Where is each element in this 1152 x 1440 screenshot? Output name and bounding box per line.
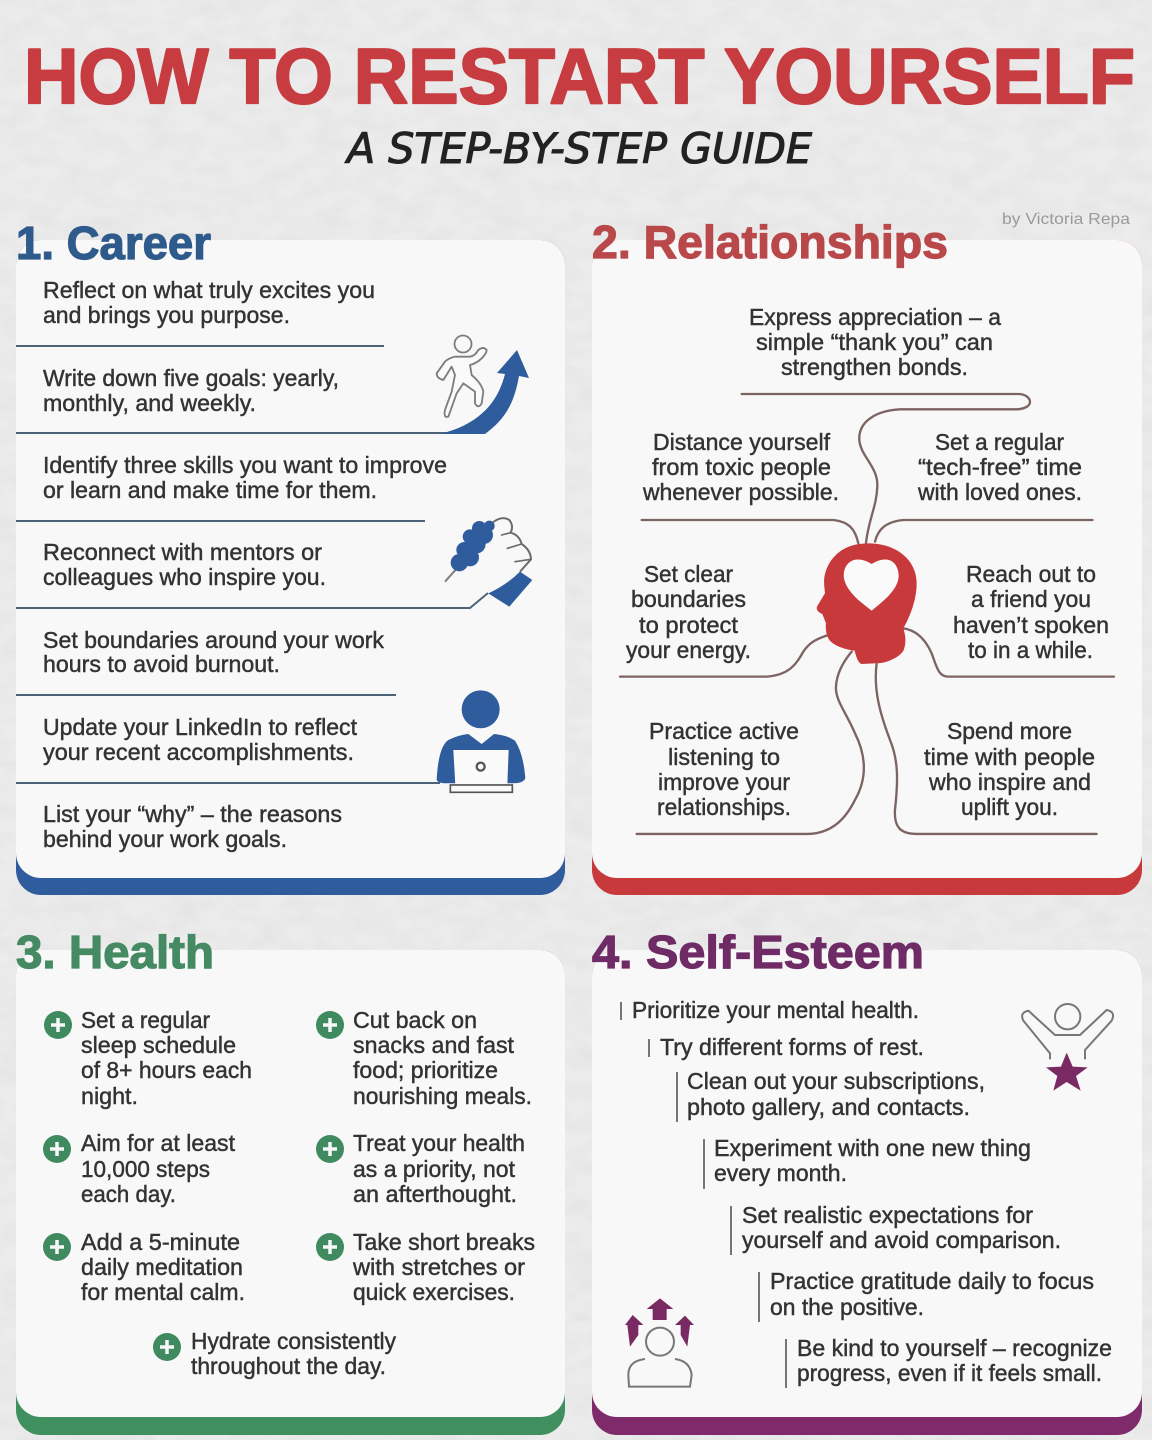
- divider rules: [16, 346, 488, 783]
- relationship tips text: Set a regular: [935, 429, 1064, 455]
- relationship tips text: Express appreciation – a: [749, 304, 1001, 330]
- icon: clenched fist: [445, 518, 532, 607]
- relationship tips text: boundaries: [631, 586, 746, 612]
- self-esteem tips text: [632, 997, 1112, 1386]
- health tips text: Hydrate consistently: [191, 1328, 396, 1354]
- self-esteem tips text: every month.: [714, 1160, 847, 1186]
- self-esteem tips text: Clean out your subscriptions,: [687, 1068, 985, 1094]
- panel card: [592, 950, 1142, 1435]
- health tips text: each day.: [81, 1181, 176, 1207]
- relationship tips text: who inspire and: [928, 769, 1091, 795]
- career tips text: and brings you purpose.: [43, 302, 290, 328]
- career tips text: List your “why” – the reasons: [43, 801, 342, 827]
- byline: by Victoria Repa: [1002, 211, 1130, 228]
- relationship tips text: whenever possible.: [642, 479, 839, 505]
- self-esteem tips text: photo gallery, and contacts.: [687, 1094, 970, 1120]
- icon: red head with heart: [817, 543, 917, 664]
- health tips text: daily meditation: [81, 1254, 243, 1280]
- career tips text: or learn and make time for them.: [43, 477, 377, 503]
- panel card: [592, 240, 1142, 895]
- career tips text: Update your LinkedIn to reflect: [43, 714, 358, 740]
- panel card: [16, 240, 565, 895]
- relationship tips text: to protect: [639, 612, 739, 638]
- health tips text: Aim for at least: [81, 1130, 236, 1156]
- career tips text: [43, 277, 447, 852]
- staircase bars: [621, 1002, 786, 1388]
- relationship tips text: Practice active: [649, 718, 799, 744]
- relationship tips text: from toxic people: [652, 454, 831, 480]
- title: HOW TO RESTART YOURSELF: [24, 32, 1135, 120]
- career tips text: hours to avoid burnout.: [43, 651, 280, 677]
- icon: runner and rising arrow: [437, 336, 529, 434]
- panel: relationships: [592, 216, 1142, 895]
- relationship tips text: improve your: [658, 769, 790, 795]
- relationship tips text: listening to: [668, 744, 780, 770]
- relationship tips text: Spend more: [947, 718, 1072, 744]
- career tips text: monthly, and weekly.: [43, 390, 256, 416]
- health tips text: Add a 5-minute: [81, 1229, 240, 1255]
- panel: self-esteem: [592, 926, 1142, 1435]
- career tips text: Reflect on what truly excites you: [43, 277, 375, 303]
- relationship tips text: Distance yourself: [653, 429, 831, 455]
- relationship tips text: Reach out to: [966, 561, 1096, 587]
- self-esteem tips text: progress, even if it feels small.: [797, 1360, 1102, 1386]
- health tips text: of 8+ hours each: [81, 1057, 252, 1083]
- relationship tips text: uplift you.: [961, 794, 1058, 820]
- relationship tips text: a friend you: [971, 586, 1091, 612]
- self-esteem tips text: Set realistic expectations for: [742, 1202, 1033, 1228]
- icon: person with rising arrows: [625, 1298, 694, 1387]
- health tips text: throughout the day.: [191, 1353, 386, 1379]
- self-esteem tips text: Be kind to yourself – recognize: [797, 1335, 1112, 1361]
- relationship tips text: Set clear: [644, 561, 733, 587]
- heading: career: 1. Career: [16, 217, 211, 269]
- self-esteem tips text: on the positive.: [770, 1294, 924, 1320]
- relationship tips text: with loved ones.: [917, 479, 1082, 505]
- health tips text: snacks and fast: [353, 1032, 515, 1058]
- relationship tips text: simple “thank you” can: [756, 329, 993, 355]
- health tips text: [81, 1007, 535, 1379]
- relationship tips text: to in a while.: [968, 637, 1093, 663]
- health tips text: 10,000 steps: [81, 1156, 210, 1182]
- self-esteem tips text: Try different forms of rest.: [660, 1034, 924, 1060]
- health tips text: sleep schedule: [81, 1032, 236, 1058]
- heading: relationships: 2. Relationships: [592, 216, 948, 268]
- relationship tips text: your energy.: [626, 637, 751, 663]
- heading: health: 3. Health: [16, 926, 214, 978]
- health tips text: for mental calm.: [81, 1279, 245, 1305]
- career tips text: colleagues who inspire you.: [43, 564, 326, 590]
- heading: self-esteem: 4. Self-Esteem: [592, 926, 924, 978]
- relationship tips text: time with people: [924, 744, 1095, 770]
- career tips text: your recent accomplishments.: [43, 739, 354, 765]
- self-esteem tips text: Experiment with one new thing: [714, 1135, 1031, 1161]
- career tips text: Set boundaries around your work: [43, 627, 385, 653]
- career tips text: Identify three skills you want to improve: [43, 452, 447, 478]
- relationship tips text: “tech-free” time: [918, 454, 1082, 480]
- health tips text: night.: [81, 1083, 138, 1109]
- career tips text: Write down five goals: yearly,: [43, 365, 339, 391]
- panel card: [16, 950, 565, 1435]
- health tips text: Set a regular: [81, 1007, 210, 1033]
- panel: career: [16, 217, 565, 895]
- health tips text: with stretches or: [352, 1254, 525, 1280]
- self-esteem tips text: Prioritize your mental health.: [632, 997, 919, 1023]
- panel: health: [16, 926, 565, 1435]
- self-esteem tips text: Practice gratitude daily to focus: [770, 1268, 1094, 1294]
- self-esteem tips text: yourself and avoid comparison.: [742, 1227, 1061, 1253]
- health tips text: an afterthought.: [353, 1181, 517, 1207]
- relationship tips text: relationships.: [657, 794, 791, 820]
- plus icons: [43, 1011, 344, 1361]
- health tips text: nourishing meals.: [353, 1083, 532, 1109]
- connector lines to head: [620, 394, 1114, 834]
- career tips text: behind your work goals.: [43, 826, 287, 852]
- health tips text: Take short breaks: [353, 1229, 535, 1255]
- icon: person at laptop: [437, 690, 525, 792]
- health tips text: quick exercises.: [353, 1279, 515, 1305]
- health tips text: Cut back on: [353, 1007, 477, 1033]
- relationship tips text: strengthen bonds.: [781, 354, 968, 380]
- health tips text: Treat your health: [353, 1130, 525, 1156]
- subtitle: A STEP-BY-STEP GUIDE: [344, 124, 812, 173]
- icon: person with star: [1022, 1004, 1113, 1091]
- career tips text: Reconnect with mentors or: [43, 539, 322, 565]
- health tips text: food; prioritize: [353, 1057, 498, 1083]
- relationship tips text: haven’t spoken: [953, 612, 1109, 638]
- health tips text: as a priority, not: [353, 1156, 516, 1182]
- relationship tips text: [626, 304, 1109, 820]
